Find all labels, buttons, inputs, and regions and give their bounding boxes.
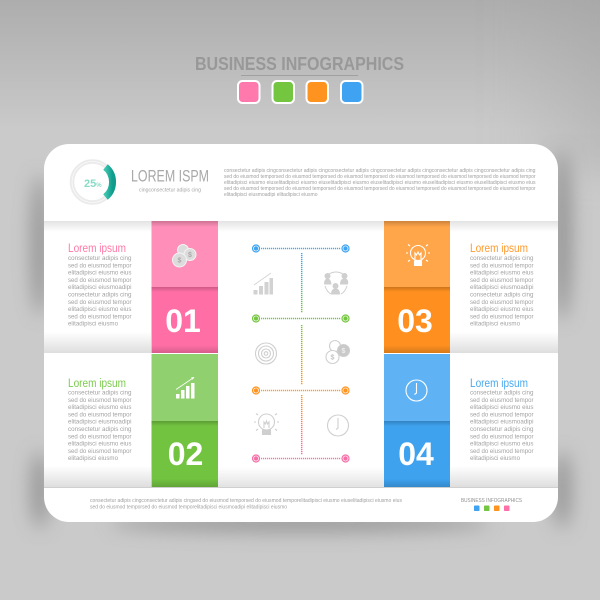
panel: footer: [44, 487, 558, 511]
text block: [90, 498, 402, 510]
text block: sed do eiusmod temporsed do eiusmod temporelitadipisci eiusmoadipi elitadipisci eiusmo: [90, 504, 287, 510]
text block: elitadipisci eiusmo eius: [68, 270, 132, 277]
swatch: blue: [341, 81, 362, 103]
number: 01: 01: [165, 303, 201, 339]
text block: elitadipisci eiusmo eius: [470, 441, 534, 448]
timeline node: blue: [252, 245, 349, 252]
column: orange: [384, 221, 450, 353]
heading: LOREM ISPM: [131, 168, 209, 186]
text block: elitadipisci eiusmoadipi: [68, 284, 132, 291]
panel: left row 1: [44, 221, 151, 353]
text block: consectetur adipis cingconsectetur adipis cingsed do eiusmod temporsed do eiusmod temporelitadipisci eiusmo eiuselitadipisci eiusmo eius: [90, 498, 402, 504]
text block: sed do eiusmod tempor: [470, 411, 534, 418]
text block: elitadipisci eiusmo eius: [68, 441, 132, 448]
text block: elitadipisci eiusmoadipi: [470, 419, 534, 426]
soft card shadows: [31, 150, 572, 532]
text block: sed do eiusmod tempor: [68, 433, 132, 440]
footer brand: [461, 498, 522, 511]
text block: [68, 255, 132, 328]
text block: consectetur adipis cing: [68, 390, 132, 396]
text block: sed do eiusmod temporsed do eiusmod temporsed do eiusmod temporsed do eiusmod temporsed do eiusmod temporsed do eiusmod tempor: [224, 174, 536, 180]
title: BUSINESS INFOGRAPHICS: [195, 54, 404, 74]
icon: gray group: [324, 272, 348, 294]
swatch: green: [272, 81, 294, 103]
text block: sed do eiusmod tempor: [470, 277, 534, 284]
panel: center timeline: [252, 245, 350, 462]
text block: elitadipisci eiusmo eius: [470, 270, 534, 277]
icon: gray target: [256, 343, 276, 364]
icon: growth chart: [176, 377, 194, 398]
column: blue: [384, 354, 450, 487]
heading: green: Lorem ipsum: [68, 378, 126, 390]
icon: clock: [406, 380, 427, 401]
panel: right row 1: [450, 221, 558, 353]
title block: [195, 54, 404, 103]
text block: sed do eiusmod tempor: [470, 313, 534, 320]
timeline node: green: [252, 315, 349, 322]
text block: elitadipisci eiusmo eius: [68, 306, 132, 313]
text block: sed do eiusmod tempor: [68, 313, 132, 320]
heading: pink: Lorem ipsum: [68, 243, 126, 255]
icon: gray clock: [328, 415, 348, 436]
text block: sed do eiusmod tempor: [470, 299, 534, 306]
icon: coins: [172, 244, 196, 267]
text block: elitadipisci eiusmoadipi elitadipisci eiusmo: [224, 192, 318, 198]
text block: elitadipisci eiusmo eius: [68, 404, 132, 411]
panel: right row 2: [450, 354, 558, 487]
text block: sed do eiusmod tempor: [68, 262, 132, 269]
text block: elitadipisci eiusmo: [470, 455, 520, 462]
text block: elitadipisci eiusmo: [470, 321, 520, 328]
chart: donut 25%: 25%: [84, 178, 102, 190]
timeline node: orange: [252, 387, 349, 394]
text block: [470, 390, 534, 462]
text block: sed do eiusmod tempor: [470, 262, 534, 269]
text block: sed do eiusmod tempor: [68, 397, 132, 404]
icon: light bulb: [406, 244, 430, 266]
text block: consectetur adipis cing: [470, 426, 534, 433]
panel: header: [72, 162, 536, 202]
swatch: orange: [306, 81, 328, 103]
text block: sed do eiusmod temporsed do eiusmod temporsed do eiusmod temporsed do eiusmod temporsed do eiusmod temporsed do eiusmod tempor: [224, 186, 536, 192]
text block: elitadipisci eiusmoadipi: [470, 284, 534, 291]
number: 02: 02: [168, 436, 203, 472]
text block: sed do eiusmod tempor: [470, 448, 534, 455]
panel: main card: [44, 144, 558, 522]
text block: consectetur adipis cing: [470, 255, 534, 262]
text block: consectetur adipis cing: [68, 292, 132, 298]
column: green: [152, 354, 218, 487]
text block: [224, 168, 536, 198]
icon: coins: $: [178, 258, 182, 264]
panel: left row 2: [44, 354, 151, 487]
text block: sed do eiusmod tempor: [470, 397, 534, 404]
text block: [470, 255, 534, 328]
band shadows: [44, 221, 558, 232]
text block: sed do eiusmod tempor: [68, 411, 132, 418]
number: 03: 03: [397, 303, 433, 339]
text block: consectetur adipis cingconsectetur adipis cingconsectetur adipis cingconsectetur adipis cingconsectetur adipis cingconsectetur adipis cing: [224, 168, 536, 174]
text block: consectetur adipis cing: [470, 390, 534, 396]
number: 04: 04: [398, 436, 434, 472]
icon: gray coins: $: [342, 348, 346, 355]
text block: elitadipisci eiusmo eius: [470, 306, 534, 313]
icon: coins: $: [188, 252, 192, 259]
text block: elitadipisci eiusmo eius: [470, 404, 534, 411]
swatch: pink: [238, 81, 260, 103]
icon: gray bulb: [254, 414, 279, 434]
text block: [68, 390, 132, 462]
text block: consectetur adipis cing: [68, 426, 132, 433]
text block: sed do eiusmod tempor: [68, 299, 132, 306]
text block: sed do eiusmod tempor: [470, 433, 534, 440]
text block: elitadipisci eiusmo: [68, 455, 118, 462]
text block: sed do eiusmod tempor: [68, 277, 132, 284]
text block: consectetur adipis cing: [470, 292, 534, 298]
icon: gray coins: [326, 340, 350, 364]
icon: gray coins: $: [331, 354, 335, 362]
column: pink: [152, 221, 218, 353]
icon: gray chart: [254, 273, 273, 294]
heading: orange: Lorem ipsum: [470, 243, 528, 255]
heading: blue: Lorem ipsum: [470, 378, 528, 390]
text block: elitadipisci eiusmoadipi: [68, 419, 132, 426]
chart: donut 25%: [72, 162, 113, 202]
timeline connectors: [261, 248, 341, 458]
text block: elitadipisci eiusmo: [68, 321, 118, 328]
timeline node: pink: [252, 455, 349, 462]
text block: sed do eiusmod tempor: [68, 448, 132, 455]
text block: elitadipisci eiusmo eiuselitadipisci eiusmo eiuselitadipisci eiusmo eiuselitadipisci eiusmo eiuselitadipisci eiusmo eiuselitadipisci eiusmo eius: [224, 180, 536, 186]
subheading: cingconsectetur adipis cing: [139, 188, 201, 194]
text block: consectetur adipis cing: [68, 255, 132, 262]
footer brand: BUSINESS INFOGRAPHICS: [461, 498, 522, 504]
